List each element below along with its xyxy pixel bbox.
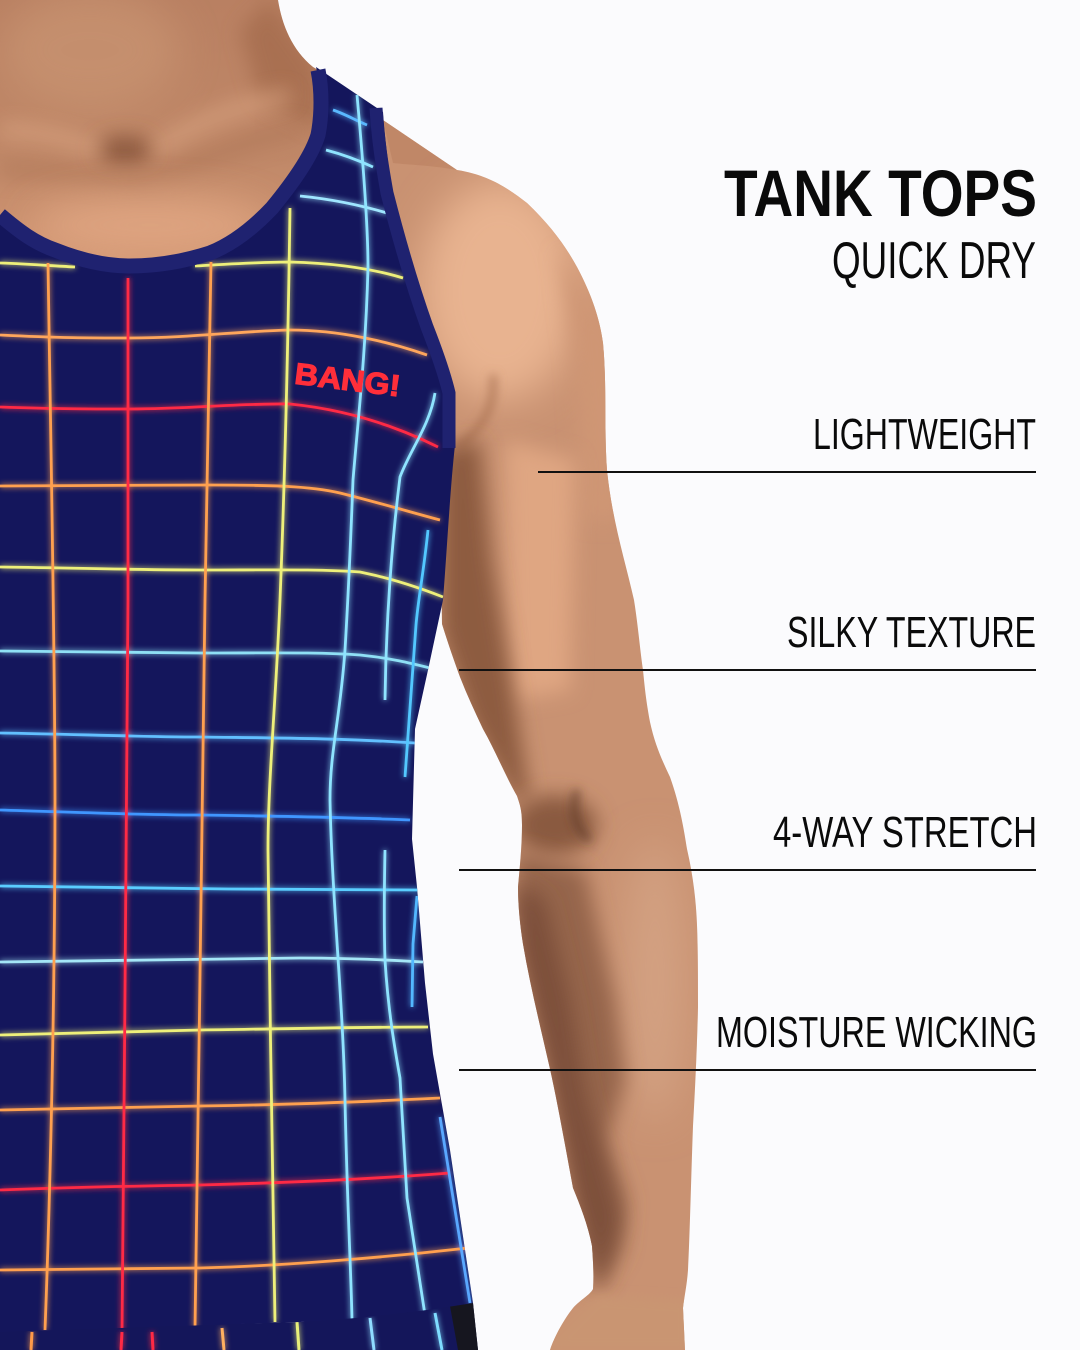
hand xyxy=(550,1298,685,1350)
model: arm and torso xyxy=(0,0,710,1350)
grid pattern xyxy=(0,95,470,1332)
triceps shadow xyxy=(440,440,530,800)
forearm shadow xyxy=(515,850,627,1295)
skin: arm and shoulder xyxy=(370,100,710,1350)
shorts xyxy=(0,1303,478,1350)
biceps highlight xyxy=(505,440,575,700)
collarbone highlight xyxy=(0,95,290,150)
shoulder rim tone xyxy=(562,272,616,522)
brand logo: BANG! xyxy=(293,358,402,403)
neck side shadow xyxy=(240,4,316,126)
shorts grid lines xyxy=(31,1313,442,1350)
shorts shadow xyxy=(450,1303,478,1350)
chest highlight xyxy=(30,199,270,251)
sternal notch xyxy=(97,136,153,164)
elbow tendon xyxy=(574,790,590,840)
forearm deep edge xyxy=(515,880,620,1290)
neckline binding xyxy=(0,70,321,266)
trapezius shade xyxy=(383,120,457,170)
tank top xyxy=(0,67,473,1332)
collarbone shadow xyxy=(156,165,189,175)
shoulder highlight xyxy=(420,180,580,400)
armpit crease xyxy=(457,375,493,448)
armhole binding xyxy=(376,108,449,448)
elbow shadow xyxy=(513,795,597,855)
skin: neck and chest xyxy=(0,0,335,258)
neck centre shade xyxy=(12,0,168,96)
forearm highlight xyxy=(625,861,685,1098)
